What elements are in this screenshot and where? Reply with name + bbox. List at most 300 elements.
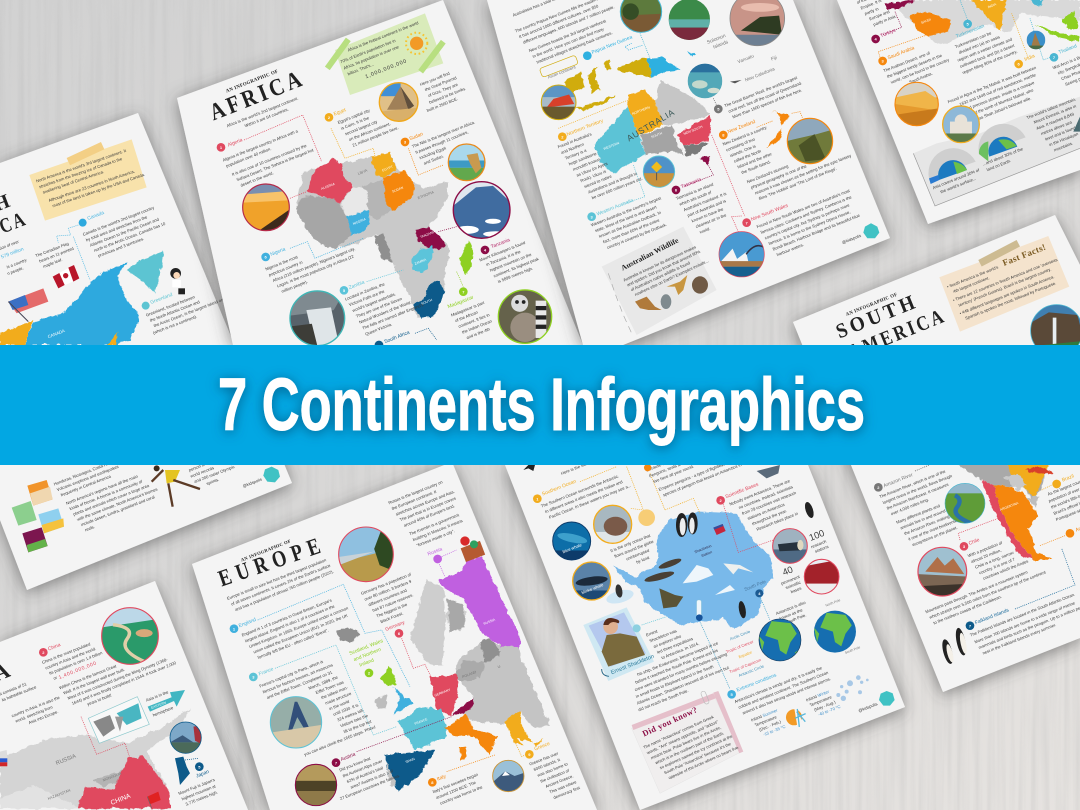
section: Nigeria: 6 <box>265 255 268 260</box>
region: Turkey <box>885 0 913 10</box>
intro text: in the world. Here you can also find many <box>532 26 605 59</box>
section: Sudan: The Nile is the longest river in Africa. <box>411 120 476 149</box>
section: Brazil and Argentina <box>1040 473 1080 546</box>
section: New South Wales: famous cities: Canberra and Sydney. Canberra is the <box>760 194 853 235</box>
photo: Eiffel Tower <box>270 697 322 748</box>
photo: Uluru <box>541 85 576 121</box>
section: Turkmenistan: region with a wetter climate and <box>957 36 1013 63</box>
title: South America: SOUTH <box>833 290 922 343</box>
photo: Angel Falls <box>1030 304 1080 345</box>
section: Amazon River: over 4,000 miles long. <box>890 497 930 516</box>
section: Sudan: Sudan <box>409 131 424 142</box>
icon: wombat <box>692 276 708 294</box>
section: Greece: This was where <box>548 779 578 795</box>
section: New Zealand: films 'The Hobbit' and 'The Lord of the Rings'. <box>758 166 838 201</box>
title: Africa: Africa is the world's 2nd largest continent. <box>226 96 299 128</box>
section: England: union called the European Union (EU). In 2020, the UK <box>253 613 349 654</box>
section: Northern Territory: monolith known <box>572 156 601 172</box>
map labels: Asia top: SAUDI <box>921 17 932 25</box>
map labels: Asia <box>47 753 132 807</box>
text: biomes: reefs. <box>84 524 96 532</box>
map labels: Antarctica: South Pole <box>744 579 767 592</box>
section: Austria: 27 European countries the famous <box>339 773 400 801</box>
section: Greece: Ancient Greece. <box>545 773 574 789</box>
text: Greenland: the North Atlantic Ocean and <box>149 299 201 323</box>
text: Shackleton: in small boats to Elephant Island in the South <box>635 664 715 699</box>
section: Scotland Wales and Northern Ireland: Scotland, Wales <box>349 638 384 657</box>
text: Everest: Mount Everest, is also in <box>1033 103 1078 125</box>
note: Fast Facts: Spanish is spoken the most, followed by Portuguese. <box>964 280 1057 321</box>
text: Germany <box>360 571 435 685</box>
section: Chile: 3 <box>963 544 966 549</box>
map: Antarctica <box>613 512 773 630</box>
icon: iceberg <box>683 565 735 595</box>
map: Europe <box>337 557 520 792</box>
section: Turkey: Europe and <box>868 9 891 21</box>
icon: penguin <box>738 601 747 619</box>
text: Germany: has 87 nature reserves. <box>372 592 414 613</box>
section: Austria: 7 <box>335 760 338 765</box>
section: Extreme conditions: Temperature <box>754 714 778 728</box>
section: Egypt: 21 million people live here. <box>352 125 399 148</box>
intro text: Asia into Europe. <box>28 709 59 725</box>
section: Tasmania: known to have the <box>691 206 725 223</box>
section: New South Wales: harbour waters. <box>776 242 805 257</box>
text: Canada <box>57 203 169 280</box>
text: Greenland <box>142 285 227 335</box>
section: Egypt: is Cairo. It is the <box>340 115 370 131</box>
section: Western Australia: 3 <box>591 214 594 219</box>
text: USA fragments: n people. <box>6 265 24 276</box>
section: India: Found in Agra is the Taj Mahal. It was built between <box>947 65 1037 104</box>
section: Northern Territory <box>557 100 643 205</box>
section: Extreme conditions: around it also has strong winds and intense storms. <box>741 676 831 715</box>
text: sprinter and footer: person in <box>188 462 206 473</box>
section: Zambia: Zambia <box>348 279 366 291</box>
photo: Patagonia <box>918 547 967 596</box>
text: Russia: stretches across Europe and Asia. <box>395 489 455 517</box>
image: penguins <box>940 627 968 665</box>
section: India: India <box>1024 53 1036 63</box>
region: Egypt <box>372 152 397 178</box>
photo: Great Barrier Reef <box>688 64 722 98</box>
region: Scotland <box>380 667 397 687</box>
text: Canada: Atlantic Ocean to the Pacific Ocean and <box>89 216 160 248</box>
title: Europe: and has a population of almost 750 million people (2022). <box>234 569 334 612</box>
intro text: world, stretching from <box>15 704 54 724</box>
section: Falkland Islands: More than 700 islands are home to a wide range of marine <box>974 600 1076 644</box>
text: Germany: Germany has a population of <box>360 572 412 596</box>
text: biomes: Volcanic eruptions and earthquakes <box>56 464 119 492</box>
section: India: 6 <box>1018 62 1021 67</box>
section: Austria: Did you know that <box>339 756 371 773</box>
panel: Europe page <box>192 462 597 810</box>
character <box>170 268 185 294</box>
photo: sunset island <box>730 0 785 46</box>
section: Northern Territory: as Uluru (or Ayers <box>576 161 608 178</box>
panel: North America page <box>0 113 292 590</box>
map: Asia top <box>885 0 1080 45</box>
section: Saudi Arabia: Saudi Arabia <box>887 45 916 61</box>
map labels: Antarctica: Station <box>701 550 713 558</box>
section: Italy <box>428 755 495 807</box>
text: Russia: The Kremlin is a government <box>408 512 460 536</box>
section: New South Wales <box>712 135 864 260</box>
note: North America intro: sweltering heat of Central America. <box>42 169 105 195</box>
region: Italy <box>445 713 497 755</box>
section: Southern Ocean: 1 <box>536 496 539 501</box>
section: Austria: 62% of Austria's total <box>346 765 384 784</box>
box: Australian Wildlife: Australia is known for its dangerous snakes <box>622 244 697 283</box>
North America upper content <box>0 139 227 345</box>
text: sprinter and footer: world records <box>190 465 215 479</box>
map labels: Asia: MONGOLIA <box>102 771 123 783</box>
Pacific labels: Solomon <box>706 33 727 46</box>
text: South Pole note: known as the <box>779 607 804 621</box>
map labels: Asia: KAZAKHSTAN <box>47 788 71 801</box>
section: Tasmania: which sits south of <box>679 189 713 207</box>
section: India: was Shah Jahan's beloved wife. <box>975 95 1032 122</box>
map: Africa <box>297 152 473 318</box>
note: Fast Facts <box>939 236 1069 332</box>
section: Chile: which stretch over 5,500 miles from the southern tip of the continent <box>929 569 1047 620</box>
photo: blue whale <box>553 522 591 560</box>
section: New South Wales: Found in New South Wales are two of Australia's most <box>756 188 850 229</box>
section: Zambia: The falls are named after England's <box>361 302 424 331</box>
icon: bird <box>723 563 753 574</box>
section: Tasmania: Tasmania <box>680 177 702 190</box>
photo: road sign <box>643 156 675 187</box>
section: Sudan: 3 <box>404 140 407 145</box>
section: Extreme conditions: Extreme conditions <box>736 672 778 694</box>
text: Shackleton: led three expeditions <box>656 636 694 655</box>
section: Southern Ocean: uninterrupted <box>625 548 651 561</box>
map labels: Europe: SPAIN <box>405 757 416 764</box>
box: Australian Wildlife: of Australia's native wildlife is found <box>630 260 691 292</box>
section: Tanzania: is 5899 metres high. <box>497 266 534 284</box>
section: New South Wales: famous. It is home to the Sydney Opera House, <box>768 209 851 246</box>
section: Austria: Austria <box>340 751 357 763</box>
section: Egypt: second largest city <box>344 119 379 136</box>
section: Algeria: Sahara Desert. The Sahara is the largest hot <box>236 147 315 182</box>
title: Africa: AN INFOGRAPHIC OF <box>226 69 279 95</box>
section: Papua New Guinea: Papua New Guinea <box>591 34 633 56</box>
map: South America <box>953 462 1053 560</box>
icon: sun <box>406 33 427 54</box>
section: France: you can also climb the 1665 steps. Phew! <box>303 724 376 757</box>
section: New South Wales: Bondi Beach, Harbour Bridge and its beautiful blue <box>772 212 861 252</box>
section: Great Barrier Reef: More than 1500 species of fish live here. <box>731 87 803 119</box>
section: Scientific Bases: Scientific Bases <box>725 482 760 500</box>
intro text: It has around 1000 different cultures, over 850 <box>518 3 600 39</box>
section: New Zealand: Island and the other <box>737 151 773 169</box>
photo: Taj Mahal <box>943 106 979 143</box>
section: Saudi Arabia: The Arabian Desert, one of <box>883 50 931 73</box>
note: Fast Facts: • South America is the world's <box>946 265 999 289</box>
map labels: Antarctica <box>694 544 767 597</box>
text: flag: The Canadian Flag <box>35 241 69 258</box>
icon: UK flag <box>713 524 726 535</box>
section: Scientific Bases: 2 <box>720 498 723 503</box>
section: Greece: was also home to <box>537 761 569 778</box>
arrow: hemisphere: EASTERN <box>151 700 167 710</box>
section: Turkmenistan <box>952 0 1018 75</box>
section: Northern Territory: Found in Australia's <box>557 131 592 149</box>
band: Asia earth facts: Asia covers around 30% of <box>932 167 980 190</box>
region: Tanzania <box>415 227 446 250</box>
section: China <box>39 614 180 716</box>
section: Turkey: 4 <box>875 37 878 42</box>
icon: koala <box>661 294 671 309</box>
section: Amazon River: Many different plants and <box>895 503 941 525</box>
icon: emperor penguins <box>676 512 698 537</box>
section: Western Australia: Western Australia <box>596 198 635 218</box>
text: Shackleton: before it reached the South Pole. Ernest and his <box>634 648 719 685</box>
section: Thailand: Thailand <box>1058 43 1078 56</box>
section: China: Its population is over 1.4 billion <box>48 650 104 676</box>
section: South Africa <box>375 328 437 349</box>
panel: South America page <box>793 215 1080 692</box>
intro text: country in Asia. It is also the <box>11 695 61 718</box>
section: Western Australia: Western Australia is the country's largest <box>590 195 662 228</box>
Pacific labels: Vanuatu <box>737 53 755 64</box>
title: Africa: Within it are 54 countries. <box>244 107 289 128</box>
icon: snowflakes <box>836 675 869 701</box>
globe lines labels: Tropic of Cancer <box>725 639 755 654</box>
icon: penguin on ice <box>605 584 635 606</box>
region: Northern Territory <box>628 89 664 136</box>
icon: sun marker <box>638 509 655 526</box>
text: Germany: The biggest is the <box>376 602 409 619</box>
card: Did you know: The name "Antarctica" comes from Greek <box>642 714 714 750</box>
section: Scientific Bases: throughout the year. <box>751 508 788 526</box>
section: Papua New Guinea <box>583 33 650 60</box>
section: Turkmenistan: Turkmenistan <box>955 23 986 40</box>
chart: surface dome <box>928 148 976 184</box>
map: Asia <box>0 708 190 808</box>
section: Japan: 5 <box>198 764 201 769</box>
text: Canada: provinces and 3 territories. <box>97 236 145 258</box>
note: North America intro: stretches from the freezing ice of Canada to the <box>38 156 123 189</box>
footer: kidspolis: @kidspolis <box>858 701 878 713</box>
map labels: Africa: TANZANIA <box>420 229 437 239</box>
arrow: hemisphere: Asia is in the <box>145 689 170 703</box>
map labels: Asia top <box>921 2 998 25</box>
text: sprinter and footer <box>187 452 280 491</box>
section: Nigeria: Nigeria <box>270 246 287 258</box>
text: flag: maple leaf. <box>42 257 63 269</box>
section: Tasmania <box>672 165 737 238</box>
text: Canada: Canada is the world's 2nd largest country <box>82 205 155 237</box>
text: Germany: Germany <box>385 620 406 633</box>
section: Southern Ocean: by land. <box>635 555 651 565</box>
section: Algeria <box>217 125 317 190</box>
note: hottest continent: 1,000,000,000 <box>365 58 408 80</box>
section: Amazon River: The Amazon River, which is one of the <box>879 469 946 499</box>
section: Chile <box>925 518 1050 627</box>
text: pyramids: built in 2560 BCE. <box>426 96 459 113</box>
text: Shackleton: did not reach the South Pole. <box>637 688 689 712</box>
section: Madagascar: of the African <box>454 309 479 323</box>
section: Tanzania: highest mountain on the <box>489 252 533 273</box>
section: Greece: the civilisation of <box>540 768 571 784</box>
region: South Africa <box>413 280 445 318</box>
section: Saudi Arabia <box>878 35 953 92</box>
section: Southern Ocean: In different areas it also meets the Indian and <box>544 479 624 514</box>
section: Northern Territory: 2 <box>561 134 564 139</box>
photo: Arabian desert <box>895 82 938 126</box>
photo: minke whale <box>573 562 611 600</box>
intro text: its habitable surface <box>1 684 38 702</box>
globe: north pole <box>814 611 856 653</box>
section: Tanzania: continent. Its highest peak <box>493 256 540 278</box>
section: Falkland Islands: 7 <box>969 623 972 628</box>
text: Shackleton: Atlantic Ocean. Shackleton rescued all of his men but <box>636 665 730 706</box>
section: Greece: 6000 islands. It <box>533 757 561 772</box>
section: Egypt <box>325 100 399 150</box>
badge: Emperor <box>523 464 780 478</box>
text: biomes: Honduras, Nicaragua, Costa Rica <box>53 460 112 487</box>
intro text: New Guinea boasts the 3rd largest rainforest <box>528 18 607 53</box>
section: Tasmania: 6 <box>675 188 678 193</box>
section: Turkey: Türkiye <box>880 28 897 39</box>
globe lines labels: Arctic Circle <box>729 629 752 641</box>
section: Chile: Mountains pass through. The Andes are a mountain system <box>925 569 1028 614</box>
section: Scotland Wales and Northern Ireland: and Northern <box>353 647 382 663</box>
note: Fast Facts: Fast Facts! <box>1001 242 1047 268</box>
section: South Africa: South Africa <box>384 330 411 345</box>
text: Shackleton: Ernest <box>645 629 658 638</box>
map labels: Europe: POLAND <box>462 670 477 679</box>
photo: reef island <box>669 0 710 40</box>
section: Saudi Arabia: Saudi Arabia. <box>908 71 933 85</box>
section: Zambia: 5 <box>343 288 346 293</box>
photo: Thailand temple <box>1027 31 1045 49</box>
North America upper content: CANADA <box>47 328 66 339</box>
section: Brazil and Argentina: Brazil <box>1061 473 1075 484</box>
map labels: Asia: RUSSIA <box>55 753 77 767</box>
section: Thailand: 7 <box>1053 55 1056 60</box>
section: Chile: Chile <box>968 537 981 547</box>
text: biomes: with the same climate. North America's biomes <box>76 486 158 522</box>
section: Turkey: partly in Asia. <box>872 13 897 27</box>
text: Germany: Black Forest. <box>380 611 404 624</box>
section: Amazon River: ecosystems on the planet. <box>911 525 958 547</box>
card: Did you know: Did you know? <box>641 705 699 738</box>
text: biomes: frequently in Central America <box>60 473 112 497</box>
section: India: and precious stones. Inside is a mosque <box>964 80 1036 112</box>
panel: Asia page (bottom left) <box>0 581 248 810</box>
note: hottest continent: 70% of Earth's population live in <box>340 38 396 64</box>
section: Extreme conditions: (May - Aug.) <box>813 699 837 712</box>
section: Amazon River: animals live in and around <box>899 508 947 530</box>
note: North America intro <box>29 139 147 221</box>
section: Austria <box>329 717 452 801</box>
globe lines labels: Tropic of Capricorn <box>729 657 762 674</box>
section: Madagascar: continent. It lies in <box>458 312 491 329</box>
section: Northern Territory: be over 600 million years old. <box>591 176 643 200</box>
section: China: 2 <box>42 650 45 655</box>
section: Madagascar: Madagascar <box>447 294 475 310</box>
icon: St Basil's <box>460 536 485 562</box>
section: Tasmania: part of Australia and is <box>687 198 727 218</box>
section: Thailand <box>1030 18 1080 89</box>
section: Italy: Italy's first societies began <box>432 772 479 794</box>
North America upper content: 579 million <box>0 246 25 261</box>
intro text: traditional villages stretching back centuries. <box>536 30 613 65</box>
photo: Amazon <box>945 483 985 523</box>
section: Falkland Islands <box>966 548 1080 657</box>
section: Turkmenistan: divided into (a) an oasis <box>958 34 1001 55</box>
section: Japan: highest mountain at <box>181 783 217 801</box>
text: Canada: north to the Arctic Ocean. Canada has 10 <box>93 221 167 253</box>
section: Zambia: Victoria Falls are the <box>348 288 386 307</box>
section: Chile: Chile is a long, narrow <box>974 550 1015 570</box>
section: Northern Territory: Territory is a <box>564 147 588 161</box>
section: Southern Ocean: Here is the Southern <box>560 457 598 476</box>
section: Algeria: population over 40 million. <box>225 146 272 168</box>
region: China <box>77 757 170 808</box>
section: Western Australia: state. Most of the land is arid desert <box>594 204 658 233</box>
text: Everest: The world's tallest mountain, <box>1026 96 1077 120</box>
map labels: Australia: NORTHERN <box>632 105 651 116</box>
section: Egypt: on the African continent. <box>348 121 391 142</box>
photo: Alps <box>493 760 524 792</box>
section: China: 1644) and it was finally completed in 1644. It took over 2,000 <box>71 660 177 706</box>
title: South America: AN INFOGRAPHIC OF <box>846 293 898 318</box>
text: Greenland: Greenland <box>150 292 174 306</box>
section: Algeria: 1 <box>220 145 223 150</box>
stats: research stations: 40 <box>781 564 794 578</box>
title: Europe: of all seven continents. It covers 2% of the Earth's surface <box>230 563 332 607</box>
section: Extreme conditions: Inland Winter <box>805 689 830 703</box>
section: Egypt: Egypt <box>333 107 347 118</box>
photo: Kilimanjaro <box>453 182 510 238</box>
icon: thermometer <box>696 600 703 621</box>
arrow: hemisphere: hemisphere <box>152 705 175 718</box>
region: South Australia <box>640 124 685 155</box>
region: Zambia <box>412 247 433 273</box>
region: Algeria <box>307 158 353 203</box>
section: France: 3 <box>252 675 255 680</box>
text: Russia: "fortress inside a city". <box>416 528 456 548</box>
band: Asia earth facts: ...and about 30% of the <box>982 146 1024 167</box>
section: India <box>947 13 1047 129</box>
icon: shipwreck <box>659 588 683 608</box>
text: Everest: level and is found <box>1044 125 1077 142</box>
map labels: Africa: NIGERIA <box>352 217 367 226</box>
section: New Zealand: New Zealand's stunning <box>746 163 790 184</box>
title: Africa: AFRICA <box>206 65 309 126</box>
region: Sudan <box>383 170 413 210</box>
map label: Argentina: ARGENTINA <box>1000 501 1020 512</box>
section: Zambia <box>340 271 427 339</box>
icon: dingo <box>667 275 687 295</box>
icon: sun and snow <box>786 707 806 728</box>
map labels: Africa <box>321 165 437 306</box>
title: Europe: Europe is small in size but has the third largest population <box>226 557 327 601</box>
section: Sudan: including Egypt <box>419 145 447 160</box>
section: Sudan: It passes through 11 countries, <box>415 129 469 155</box>
connectors: Antarctica <box>627 467 773 689</box>
section: Chile: With a population of <box>967 540 1003 558</box>
section: Scotland Wales and Northern Ireland <box>349 638 390 677</box>
region: Western Australia <box>594 106 646 173</box>
region: Nigeria <box>347 210 370 236</box>
title: North America <box>0 190 30 246</box>
section: Extreme conditions: Temperature <box>809 694 833 708</box>
tag: Asian continent: Asian continent <box>547 64 577 80</box>
